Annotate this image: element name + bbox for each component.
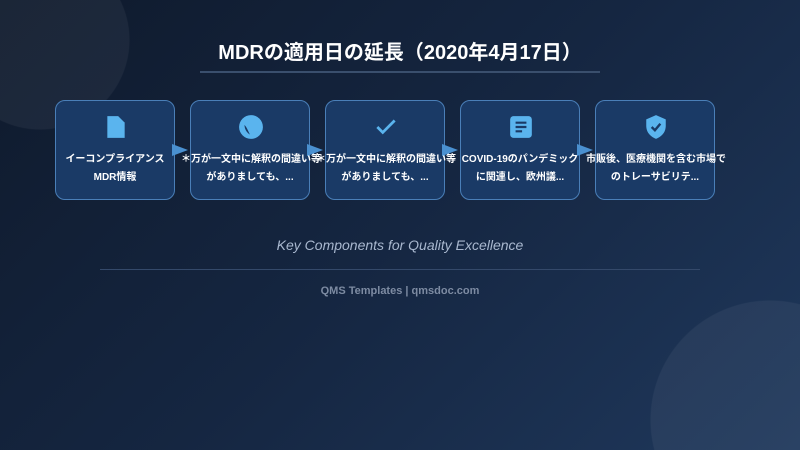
card 1: MDR情報: [94, 172, 136, 183]
arrow 1: [172, 144, 188, 156]
title: MDRの適用日の延長（2020年4月17日）: [218, 42, 582, 64]
icon: file: [107, 116, 125, 138]
card 3: [325, 100, 445, 200]
card 2: [190, 100, 310, 200]
icon: shield: [646, 115, 666, 139]
card 5: 市販後、医療機関を含む市場で: [586, 154, 726, 165]
card 3: ＊万が一文中に解釈の間違い等: [316, 154, 456, 165]
subtitle: Key Components for Quality Excellence: [277, 237, 523, 253]
footer: QMS Templates | qmsdoc.com: [321, 285, 479, 297]
card 2: がありましても、...: [206, 172, 294, 183]
card 1: [55, 100, 175, 200]
card 4: [460, 100, 580, 200]
arrow 4: [577, 144, 593, 156]
card 1: イーコンプライアンス: [65, 154, 165, 165]
icon: globe: [239, 115, 263, 139]
card 4: COVID-19のパンデミック: [462, 154, 578, 165]
card 3: がありましても、...: [341, 172, 429, 183]
icon: document: [510, 116, 532, 138]
card 5: [595, 100, 715, 200]
icon: check: [376, 120, 396, 134]
card 4: に関連し、欧州議...: [476, 172, 564, 183]
arrow 2: [307, 144, 323, 156]
arrow 3: [442, 144, 458, 156]
card 5: のトレーサビリテ...: [611, 172, 699, 183]
card 2: ＊万が一文中に解釈の間違い等: [181, 154, 321, 165]
